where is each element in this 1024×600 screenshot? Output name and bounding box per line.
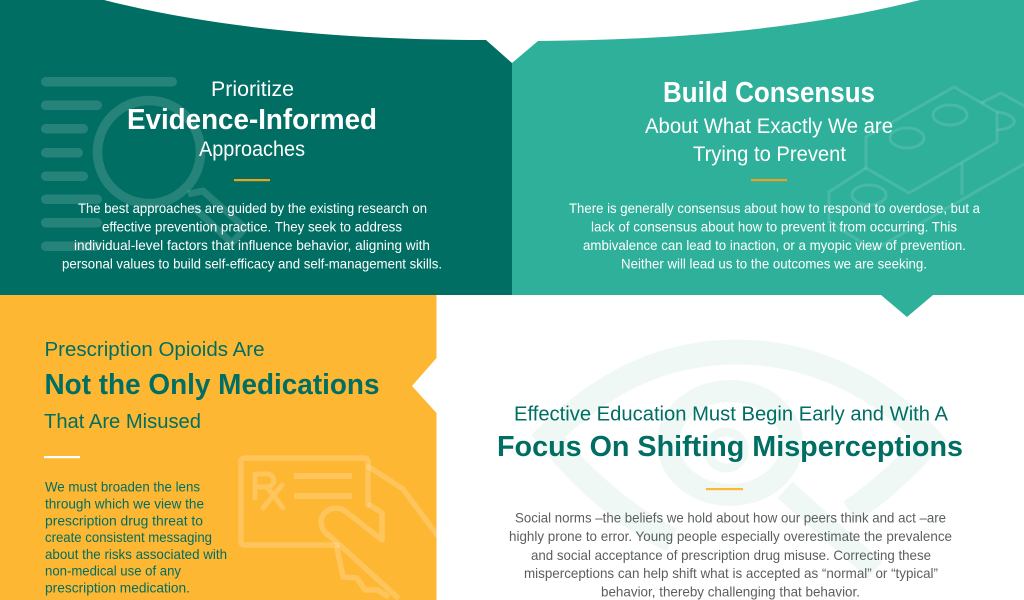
body text: medications: We must broaden the lens xyxy=(45,478,200,494)
body text: evidence-informed: effective prevention practice. They seek to address xyxy=(102,218,402,234)
body text: medications: about the risks associated with xyxy=(45,546,227,562)
heading: shifting misperceptions: Focus On Shifting Misperceptions xyxy=(497,431,963,463)
icon: document with magnifying glass xyxy=(41,77,245,251)
body text: build consensus: Neither will lead us to the outcomes we are seeking. xyxy=(621,256,927,272)
icon: hand holding prescription xyxy=(241,458,437,597)
divider accent xyxy=(751,179,787,181)
heading: shifting misperceptions: Effective Education Must Begin Early and With A xyxy=(514,402,948,426)
heading: prioritize evidence-informed approaches: Prioritize xyxy=(211,78,294,101)
icon: eye with magnifying glass xyxy=(548,352,930,570)
heading: not the only medications xyxy=(44,338,380,433)
body text: evidence-informed: personal values to build self-efficacy and self-management skills. xyxy=(62,256,442,272)
body text: misperceptions: behavior, thereby challenging that behavior. xyxy=(601,584,860,600)
panel: evidence-informed approaches xyxy=(0,0,512,295)
body text: misperceptions: misperceptions can help shift what is accepted as “normal” or “typical” xyxy=(524,565,938,581)
icon: isometric building blocks xyxy=(829,87,1024,250)
body text: medications: prescription drug threat to xyxy=(45,512,203,528)
divider accent xyxy=(234,179,270,181)
heading: prioritize evidence-informed approaches xyxy=(127,78,377,161)
panel: build consensus xyxy=(512,0,1024,317)
panel: shifting misperceptions xyxy=(497,352,963,600)
heading: prioritize evidence-informed approaches: Evidence-Informed xyxy=(127,104,377,136)
heading: build consensus xyxy=(645,77,893,166)
heading: build consensus: Trying to Prevent xyxy=(693,143,846,166)
body text: medications: non-medical use of any xyxy=(45,562,181,578)
body text: build consensus xyxy=(569,200,980,272)
body text: misperceptions: Social norms –the beliefs we hold about how our peers think and act –are xyxy=(515,510,946,526)
divider accent xyxy=(706,488,743,490)
heading: not the only medications: Prescription Opioids Are xyxy=(44,338,264,361)
body text: evidence-informed: individual-level factors that influence behavior, aligning with xyxy=(74,237,430,253)
heading: build consensus: About What Exactly We are xyxy=(645,115,893,138)
heading: not the only medications: That Are Misused xyxy=(44,410,201,433)
body text: build consensus: There is generally consensus about how to respond to overdose, but a xyxy=(569,200,980,216)
body text: misperceptions: highly prone to error. Young people especially overestimate the prevalence xyxy=(509,528,952,544)
body text: medications: create consistent messaging xyxy=(45,529,212,545)
body text: evidence-informed: The best approaches are guided by the existing research on xyxy=(78,200,427,216)
heading: prioritize evidence-informed approaches: Approaches xyxy=(199,138,305,161)
divider accent xyxy=(44,456,80,458)
heading: build consensus: Build Consensus xyxy=(663,77,875,109)
panel: not the only medications xyxy=(0,295,437,600)
body text: medications: through which we view the xyxy=(45,496,204,512)
body text: build consensus: ambivalence can lead to inaction, or a myopic view of prevention. xyxy=(583,237,966,253)
body text: misperceptions xyxy=(509,510,952,600)
body text: medications: prescription medication. xyxy=(45,580,190,596)
body text: misperceptions: and social acceptance of prescription drug misuse. Correcting these xyxy=(531,547,931,563)
body text: medications xyxy=(45,478,227,596)
heading: shifting misperceptions xyxy=(497,402,963,463)
body text: build consensus: lack of consensus about how to prevent it from occurring. This xyxy=(591,218,957,234)
body text: evidence-informed xyxy=(62,200,442,272)
heading: not the only medications: Not the Only Medications xyxy=(44,369,380,401)
